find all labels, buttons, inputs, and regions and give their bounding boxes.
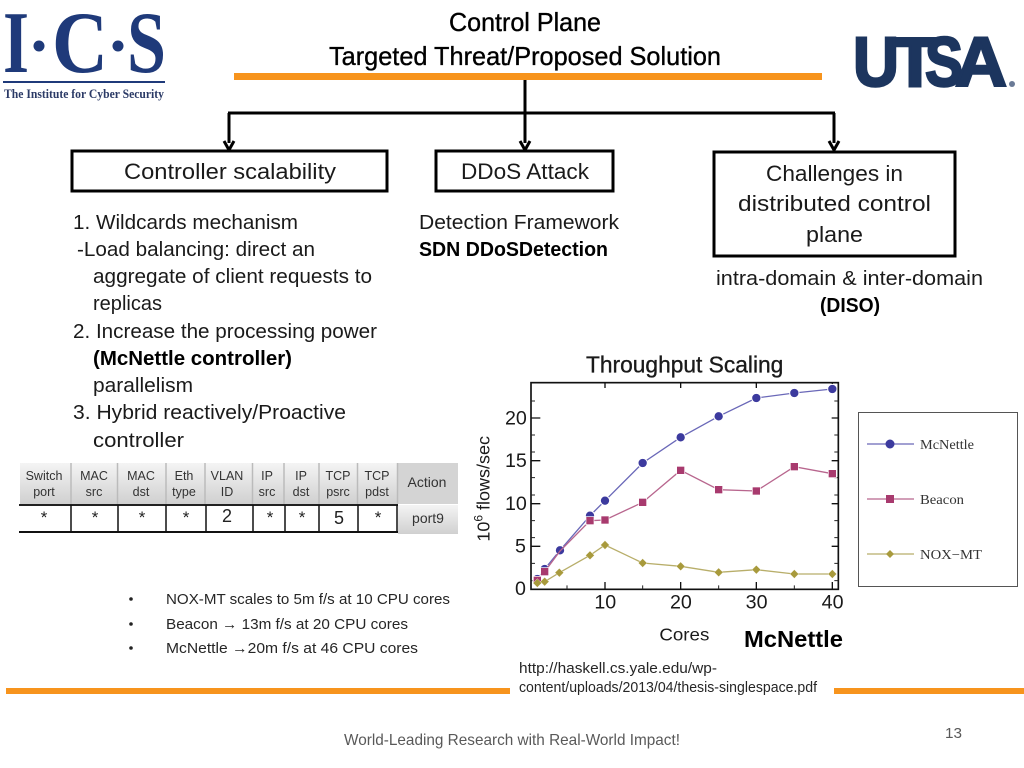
axis labels xyxy=(472,407,844,645)
flow table: * xyxy=(299,508,306,527)
flow table: psrc xyxy=(326,485,350,499)
text: detection framework: SDN DDoSDetection xyxy=(419,239,608,261)
flow table: VLAN xyxy=(211,469,243,483)
axis labels: 10 xyxy=(594,591,616,613)
text: DISO xyxy=(716,267,983,317)
bullet list: throughput: NOX-MT scales to 5m f/s at 10 CPU cores xyxy=(166,591,450,608)
text: scalability list: aggregate of client requests to xyxy=(93,265,372,288)
logo: UTSA: T xyxy=(893,23,937,101)
logo: UTSA: S xyxy=(925,23,963,101)
title xyxy=(329,7,721,71)
chart legend xyxy=(858,412,1018,586)
box: challenges: distributed control xyxy=(738,191,931,216)
flow table: IP xyxy=(261,469,273,483)
footer tagline: World-Leading Research with Real-World Impact! xyxy=(344,732,680,749)
axis labels: 20 xyxy=(670,591,692,613)
line chart: throughput scaling xyxy=(472,351,844,645)
text: scalability list: (McNettle controller) xyxy=(93,348,292,370)
axis labels: 40 xyxy=(822,591,844,613)
text: scalability list: controller xyxy=(93,429,184,452)
flow table: TCP xyxy=(326,469,350,483)
flow table: * xyxy=(41,508,48,527)
axis labels: 30 xyxy=(746,591,768,613)
axis labels: 10 xyxy=(473,522,493,542)
title underline xyxy=(234,73,822,80)
footer rule left xyxy=(6,688,510,694)
flow table: Action xyxy=(408,474,446,490)
chart title: Throughput Scaling xyxy=(586,351,783,377)
text: scalability list: replicas xyxy=(93,292,162,315)
box: controller scalability xyxy=(72,151,387,191)
flow table: * xyxy=(139,508,146,527)
flow table: MAC xyxy=(80,469,108,483)
flow table: port xyxy=(33,485,55,499)
series: NOX-MT xyxy=(533,541,837,587)
bullet list: throughput xyxy=(129,591,450,657)
flow table xyxy=(19,463,458,534)
flow table: dst xyxy=(293,485,310,499)
flow table: 5 xyxy=(334,508,344,528)
flow table: src xyxy=(259,485,275,499)
flow table: MAC xyxy=(127,469,155,483)
axis labels: Cores xyxy=(659,625,709,645)
text: DISO: intra-domain & inter-domain xyxy=(716,267,983,290)
chart legend: NOX−MT xyxy=(920,548,982,563)
logo: ICS: The Institute for Cyber Security xyxy=(4,87,165,101)
text: scalability list: parallelism xyxy=(93,374,193,397)
box: challenges xyxy=(714,152,955,256)
flow table: TCP xyxy=(364,469,390,483)
logo: UTSA xyxy=(853,23,1015,101)
flow table: * xyxy=(183,508,190,527)
logo: ICS xyxy=(3,0,166,101)
series: McNettle xyxy=(533,384,837,584)
text: detection framework: Detection Framework xyxy=(419,211,620,234)
chart caption: McNettle: McNettle xyxy=(744,626,843,652)
box: controller scalability: Controller scalability xyxy=(124,159,337,184)
flow table: 2 xyxy=(222,506,232,526)
flow table: * xyxy=(375,508,382,527)
axis labels: 15 xyxy=(505,450,527,472)
flow table: * xyxy=(267,508,274,527)
footer rule right xyxy=(834,688,1024,694)
text: scalability list: 3. Hybrid reactively/Proactive xyxy=(73,401,346,424)
flow table: pdst xyxy=(365,485,389,499)
chart legend: Beacon xyxy=(920,493,964,508)
axis labels: flows/sec xyxy=(473,436,493,515)
axis labels: 5 xyxy=(515,536,526,558)
text: scalability list: 2. Increase the processing power xyxy=(73,320,377,343)
box: challenges: Challenges in xyxy=(766,161,903,186)
flow table: * xyxy=(92,508,99,527)
bullet list: throughput: McNettle →20m f/s at 46 CPU cores xyxy=(166,640,418,657)
flow table: port9 xyxy=(412,510,444,526)
title: Targeted Threat/Proposed Solution xyxy=(329,41,721,71)
plot frame and ticks xyxy=(531,383,838,589)
logo: UTSA: A xyxy=(955,23,1007,101)
axis labels: 10 xyxy=(505,493,527,515)
axis labels: 6 xyxy=(472,515,486,522)
flow table: IP xyxy=(295,469,307,483)
logo: UTSA: U xyxy=(853,23,899,101)
source URL: http://haskell.cs.yale.edu/wp- xyxy=(519,660,717,677)
text: detection framework xyxy=(419,211,620,261)
source URL xyxy=(519,660,818,696)
connector arrows xyxy=(224,80,839,150)
flow table: src xyxy=(86,485,102,499)
flow table: type xyxy=(172,485,196,499)
box: DDoS attack xyxy=(436,151,613,191)
flow table: ID xyxy=(221,485,233,499)
axis labels: 0 xyxy=(515,578,526,600)
bullet list: throughput: Beacon → 13m f/s at 20 CPU cores xyxy=(166,616,408,633)
title: Control Plane xyxy=(449,7,601,37)
page number: 13 xyxy=(945,725,962,742)
text: scalability list: 1. Wildcards mechanism xyxy=(73,211,298,234)
chart legend: McNettle xyxy=(920,438,974,453)
axis labels: 20 xyxy=(505,407,527,429)
series: Beacon xyxy=(533,463,836,584)
box: DDoS attack: DDoS Attack xyxy=(461,159,590,184)
flow table: Eth xyxy=(175,469,193,483)
text: scalability list xyxy=(73,211,377,452)
text: DISO: (DISO) xyxy=(820,295,880,317)
flow table: Switch xyxy=(26,469,62,483)
flow table: dst xyxy=(133,485,150,499)
box: challenges: plane xyxy=(806,222,863,247)
text: scalability list: -Load balancing: direct an xyxy=(77,238,315,261)
source URL: content/uploads/2013/04/thesis-singlespace.pdf xyxy=(519,679,818,696)
